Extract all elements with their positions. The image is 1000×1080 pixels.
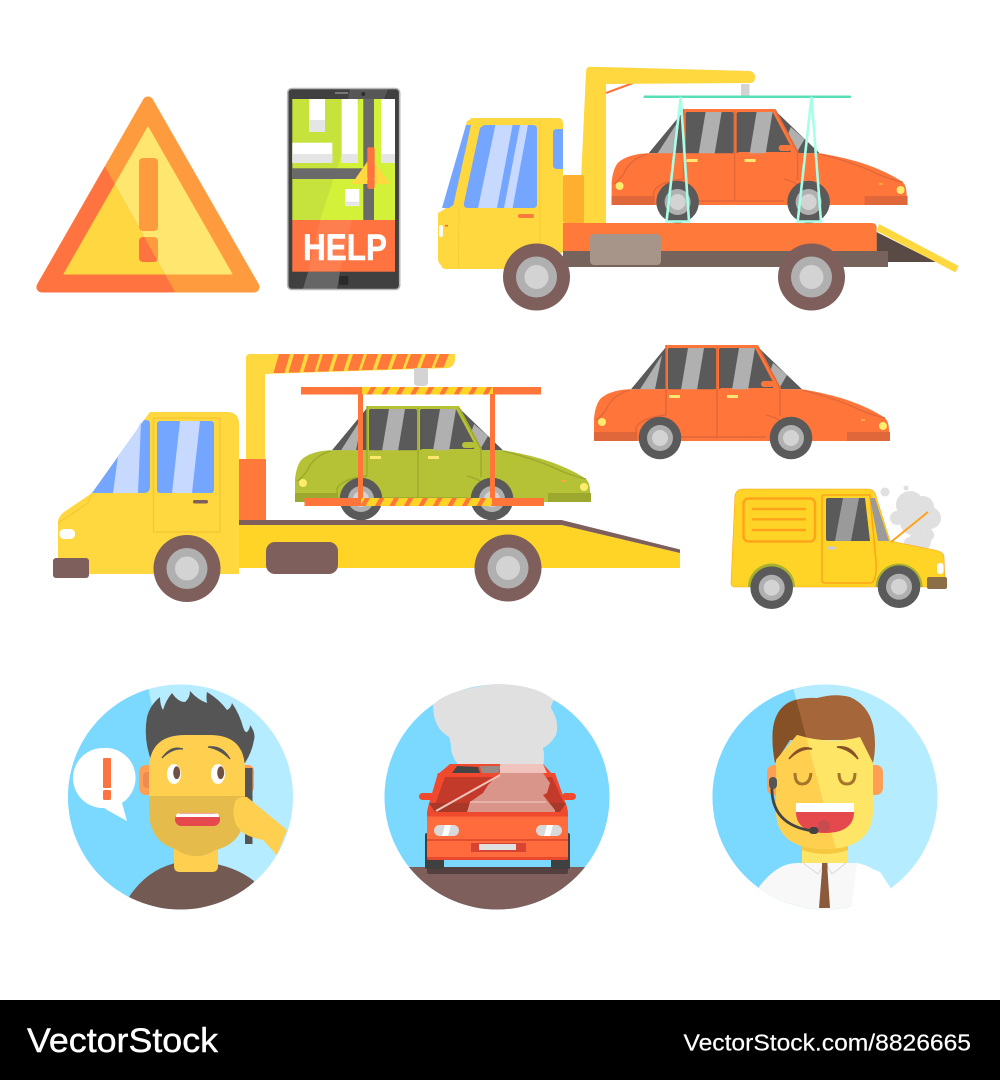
green car on platform [295, 406, 591, 520]
road [409, 867, 585, 910]
ears [139, 765, 254, 795]
tilting ramp [877, 224, 959, 272]
flatbed [239, 520, 680, 574]
truck cab [53, 412, 239, 578]
hair [772, 695, 875, 763]
broken down yellow van with smoke [731, 486, 947, 609]
facial features [789, 747, 858, 833]
panel: worried driver on the phone [68, 684, 293, 910]
truck wheels [503, 244, 845, 310]
footer brand: VectorStock [27, 1022, 219, 1060]
lifted orange car [612, 109, 908, 223]
face [149, 735, 245, 850]
car rear view [419, 764, 576, 874]
truck bed [563, 223, 888, 267]
lifting straps [644, 96, 851, 222]
striped crane arm [239, 354, 455, 520]
shirt [758, 862, 890, 910]
footer bar [0, 1000, 1000, 1080]
lifting frame [301, 387, 544, 506]
hair [146, 691, 254, 763]
panel: smiling call center operator [712, 684, 938, 910]
truck wheels [154, 534, 542, 602]
smoke cloud [433, 684, 557, 767]
engine smoke [880, 486, 941, 552]
neck [802, 843, 848, 865]
van wheels [748, 564, 922, 609]
help label: HELP [303, 227, 387, 268]
facial features [162, 747, 230, 826]
speech bubble with exclamation [73, 748, 136, 821]
smartphone with help map [288, 88, 400, 290]
van door and windows [822, 495, 947, 589]
crane arm [563, 67, 755, 223]
hand and arm [234, 797, 287, 855]
shirt [129, 863, 254, 910]
flatbed tow truck with green car [53, 354, 680, 602]
warning triangle sign [42, 102, 254, 287]
headset [769, 777, 818, 834]
van cargo panel [744, 498, 815, 542]
raised hood [891, 512, 928, 542]
truck cab [438, 118, 563, 269]
van body [731, 489, 945, 587]
footer image id: VectorStock.com/8826665 [684, 1030, 971, 1056]
panel: smoking broken car [380, 684, 620, 917]
tow truck with lifted orange car [438, 67, 959, 310]
neck [174, 845, 218, 872]
phone [245, 768, 252, 844]
ears [767, 765, 883, 795]
orange sedan [594, 345, 890, 459]
face [776, 735, 873, 849]
